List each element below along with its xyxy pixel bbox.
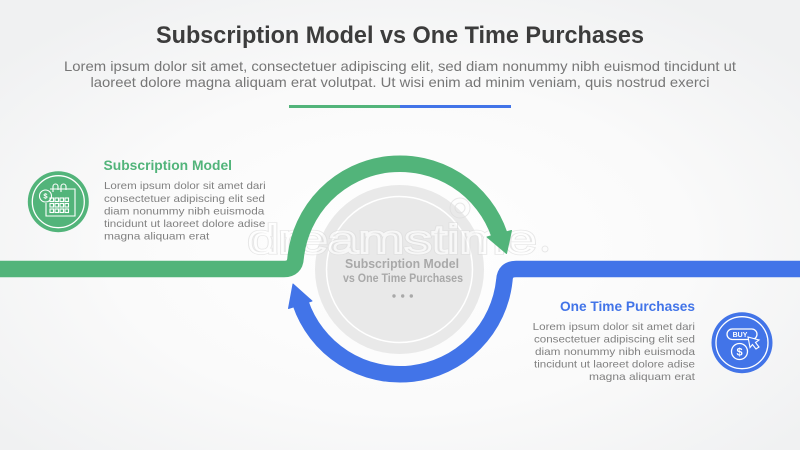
icon: buy button with dollar coin bbox=[712, 312, 772, 373]
body text: one time purchases: diam nonummy nibh euismoda bbox=[535, 346, 695, 358]
body text: one time purchases: tincidunt ut laoreet dolore adise bbox=[534, 358, 695, 370]
central label: vs One Time Purchases bbox=[343, 271, 463, 285]
intro text: laoreet dolore magna aliquam erat volutpat. Ut wisi enim ad minim veniam, quis nostrud exerci bbox=[90, 74, 710, 90]
heading: subscription model: Subscription Model bbox=[104, 157, 232, 173]
intro text bbox=[64, 58, 736, 90]
blue cycle arrow and line bbox=[288, 269, 800, 374]
body text: one time purchases: consectetuer adipiscing elit sed bbox=[534, 334, 695, 346]
watermark: dreamstime bbox=[248, 218, 536, 262]
body text: subscription model: diam nonummy nibh euismoda bbox=[104, 206, 264, 218]
title divider bbox=[289, 105, 511, 108]
body text: subscription model: magna aliquam erat bbox=[104, 230, 209, 242]
body text: subscription model: Lorem ipsum dolor sit amet dari bbox=[104, 180, 266, 192]
icon: buy button with dollar coin: $ bbox=[736, 346, 743, 358]
body text: one time purchases bbox=[533, 321, 695, 383]
title: Subscription Model vs One Time Purchases bbox=[156, 22, 644, 49]
body text: subscription model bbox=[104, 180, 266, 242]
central disc bbox=[315, 185, 484, 354]
icon: calendar with dollar coin bbox=[28, 171, 89, 232]
intro text: Lorem ipsum dolor sit amet, consectetuer adipiscing elit, sed diam nonummy nibh euismod tincidunt ut bbox=[64, 58, 736, 74]
icon: buy button with dollar coin: BUY bbox=[733, 332, 748, 339]
watermark: dreamstime bbox=[248, 218, 536, 262]
body text: one time purchases: magna aliquam erat bbox=[589, 371, 695, 383]
green cycle arrow and line bbox=[0, 164, 512, 269]
body text: subscription model: tincidunt ut laoreet dolore adise bbox=[104, 218, 265, 230]
body text: subscription model: consectetuer adipiscing elit sed bbox=[104, 193, 265, 205]
central label: Subscription Model bbox=[345, 257, 459, 271]
heading: one time purchases: One Time Purchases bbox=[560, 298, 695, 314]
icon: calendar with dollar coin: $ bbox=[43, 192, 48, 201]
body text: one time purchases: Lorem ipsum dolor sit amet dari bbox=[533, 321, 695, 333]
central label bbox=[343, 257, 463, 298]
watermark bbox=[248, 198, 548, 262]
